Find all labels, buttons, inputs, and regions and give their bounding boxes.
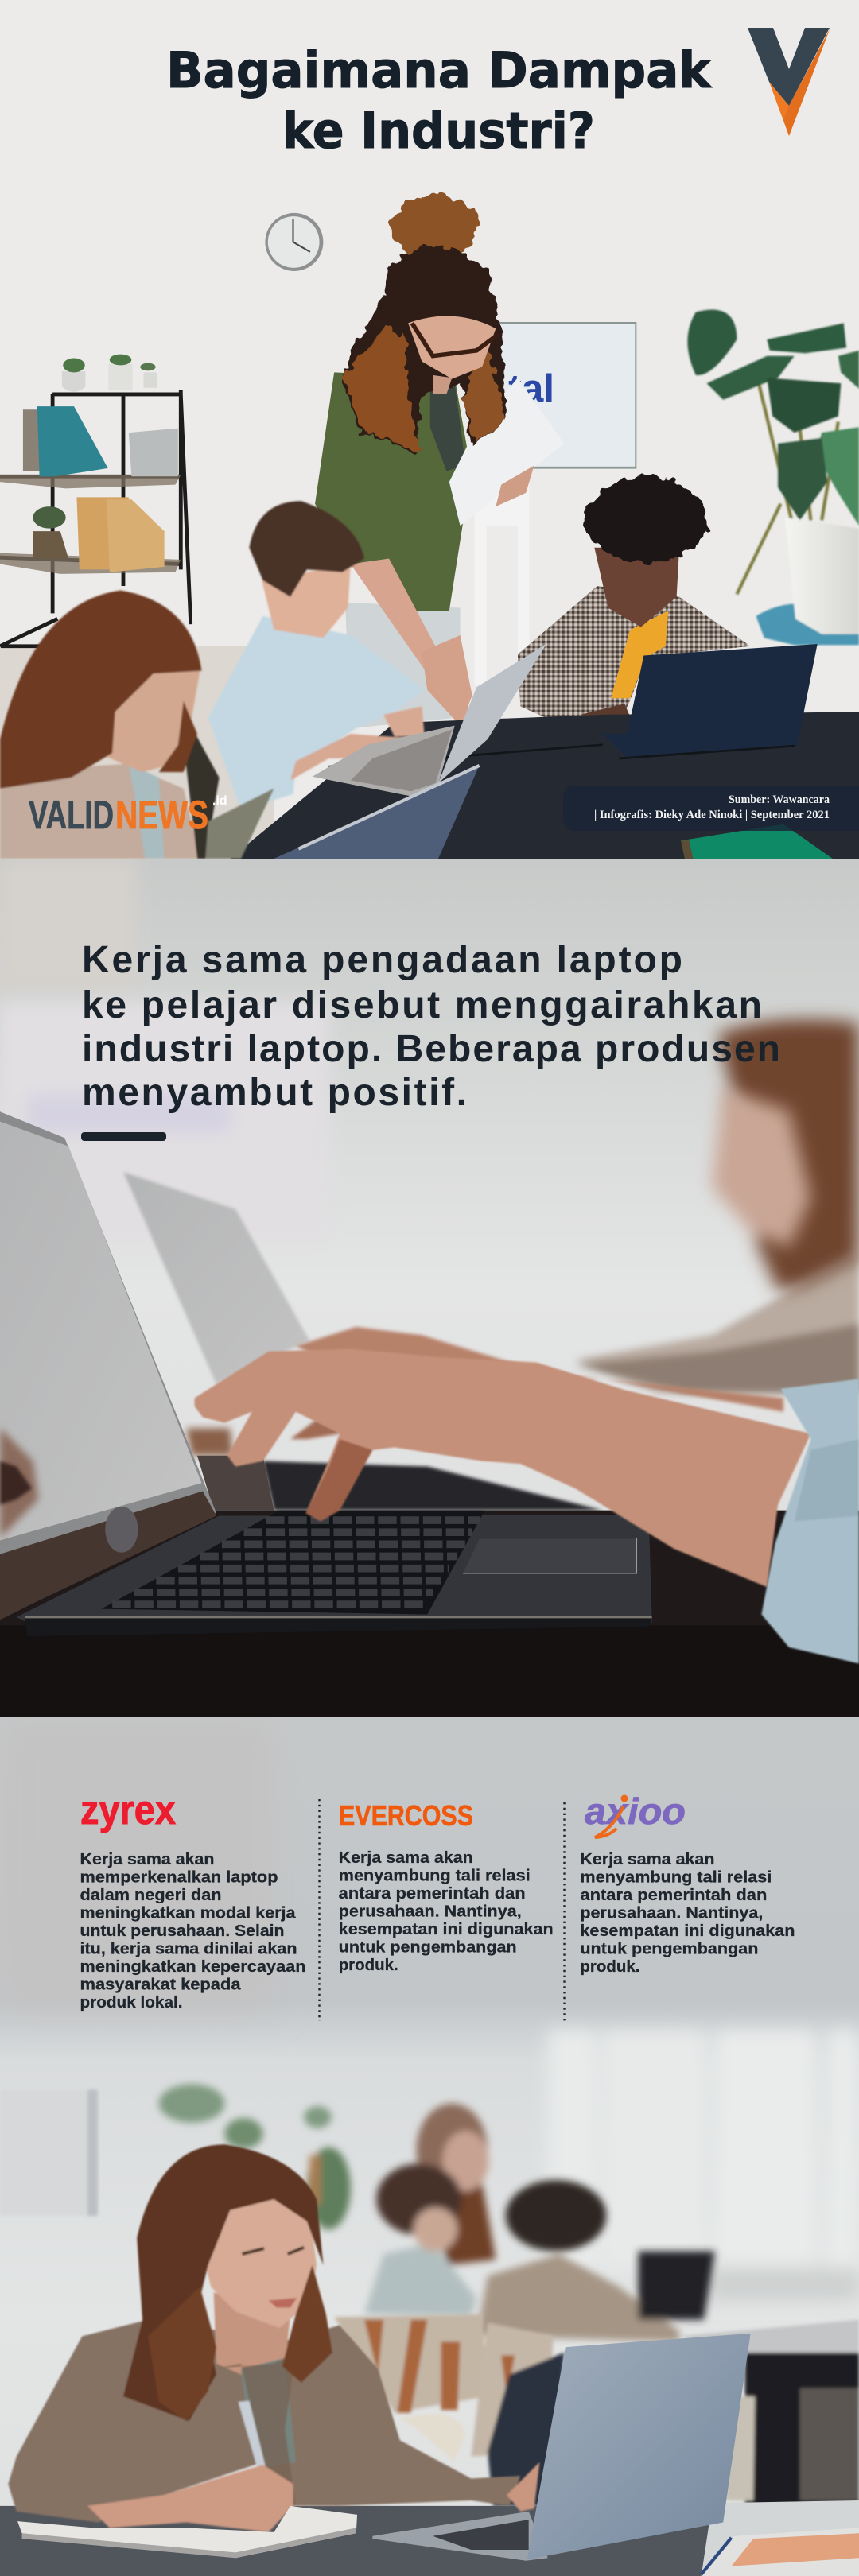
credit box [563,786,859,831]
girl student [8,2144,539,2532]
text: Zyrex statement: masyarakat kepada [80,1975,241,1994]
text: Zyrex statement: untuk perusahaan. Selain [80,1922,285,1940]
lead text: ke pelajar disebut menggairahkan [82,984,762,1026]
dark laptop [603,644,818,758]
text: Evercoss statement: produk. [339,1956,398,1974]
girl on the left [0,591,274,859]
blurred people [364,2104,715,2341]
text: Axioo statement: produk. [580,1957,639,1976]
boy in blue shirt [208,501,427,810]
text: Axioo statement: kesempatan ini digunakan [580,1922,795,1940]
icon: V logo [748,28,830,136]
text: Axioo statement [580,1850,795,1976]
text: Evercoss statement [339,1849,554,1974]
text: Zyrex statement: memperkenalkan laptop [80,1868,278,1886]
title heading [166,41,713,160]
potted plant [687,310,859,645]
logo: Validnews [29,793,227,837]
grey laptop [313,643,546,797]
wall clock icon [265,213,323,271]
column: Zyrex [80,1787,305,2012]
logo: Validnews: NEWS [115,793,208,837]
text: Evercoss statement: menyambung tali relasi [339,1867,531,1884]
logo: Validnews: .id [212,794,227,808]
lead text: industri laptop. Beberapa produsen [82,1028,780,1070]
shirt sleeve [761,1379,859,1664]
logo: Evercoss: EVERCOSS [339,1799,473,1832]
laptop base and keyboard [17,1511,652,1636]
back hand [296,1327,783,1412]
column: Evercoss [339,1799,554,1974]
student's laptop [372,2334,751,2561]
column: Axioo [580,1790,795,1976]
panel: student with laptop photo [0,1717,859,2576]
blurred window blinds [548,2030,859,2301]
table [230,712,859,859]
text: Axioo statement: menyambung tali relasi [580,1868,772,1886]
teacher [315,192,535,727]
wall monitor: tal [508,366,554,410]
text: Zyrex statement: itu, kerja sama dinilai akan [80,1940,297,1957]
text: Zyrex statement: dalam negeri dan [80,1886,221,1904]
text: Zyrex statement: meningkatkan kepercayaan [80,1957,305,1976]
second laptop [123,1172,603,1511]
wall background [0,0,859,859]
logo: Validnews: VALID [29,793,114,837]
lead text [82,939,780,1114]
foreground laptop [274,766,480,859]
text: Evercoss statement: untuk pengembangan [339,1938,517,1956]
blurred plants [159,2084,351,2229]
blurred classroom background [0,1717,859,2576]
text: Axioo statement: antara pemerintah dan [580,1886,767,1904]
blurred chairs and desk [334,2314,859,2506]
panel: laptop typing photo [0,859,859,1717]
text: Evercoss statement: antara pemerintah dan [339,1884,526,1903]
panel: brand statements [80,1787,795,2023]
typing hand and arm [195,1348,810,1587]
shelf with folders and plants [0,355,191,646]
title heading: Bagaimana Dampak [166,41,713,99]
text: Zyrex statement [80,1850,305,2012]
text: Zyrex statement: produk lokal. [80,1993,183,2012]
text: Evercoss statement: kesempatan ini digunakan [339,1920,554,1938]
blurred background [0,859,859,1511]
panel: hero classroom photo [0,0,859,859]
text: Axioo statement: perusahaan. Nantinya, [580,1903,763,1922]
text: Evercoss statement: perusahaan. Nantinya, [339,1902,522,1921]
green book [681,824,833,859]
logo: Axioo: axioo [585,1790,686,1832]
desk [0,1511,859,1625]
blurred girl in background [575,1019,859,1393]
credit box: | Infografis: Dieky Ade Ninoki | September 2021 [594,809,830,821]
main laptop screen [0,1111,216,1620]
boy in plaid shirt [518,478,751,736]
lead text: Kerja sama pengadaan laptop [82,939,682,981]
title heading: ke Industri? [282,102,595,160]
wall monitor [474,322,636,685]
logo: Zyrex: zyrex [80,1787,176,1833]
text: Zyrex statement: Kerja sama akan [80,1850,215,1868]
accent bar [81,1132,166,1141]
lead text: menyambut positif. [82,1072,467,1114]
notebook [17,2506,357,2558]
text: Axioo statement: Kerja sama akan [580,1850,714,1868]
desk [0,2506,709,2576]
credit box: Sumber: Wawancara [729,793,830,806]
text: Evercoss statement: Kerja sama akan [339,1849,473,1867]
text: Zyrex statement: meningkatkan modal kerja [80,1903,296,1922]
text: Axioo statement: untuk pengembangan [580,1940,758,1957]
